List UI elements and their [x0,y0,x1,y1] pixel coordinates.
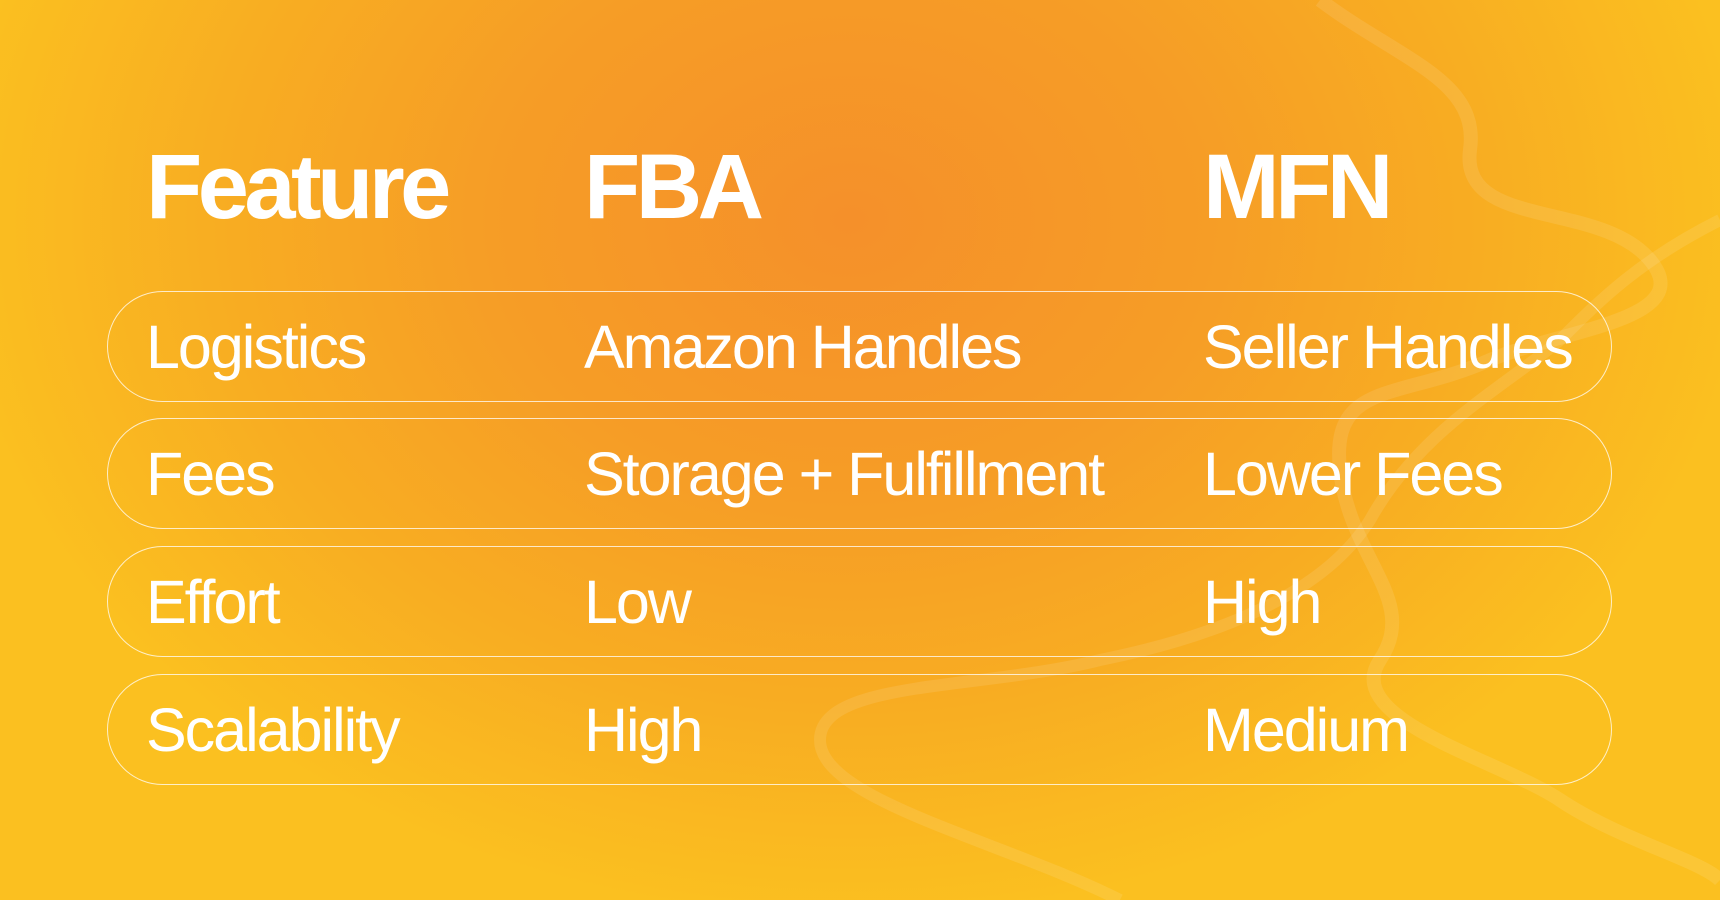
row: Logistics: Logistics [146,312,365,380]
header: Feature: Feature [146,136,447,238]
row: Fees: Storage + Fulfillment [584,440,1103,508]
row: Fees: Fees [146,440,274,508]
row: Logistics [107,291,1612,402]
row: Effort: Low [584,568,690,636]
row: Fees: Lower Fees [1203,440,1502,508]
row: Scalability: Scalability [146,696,399,764]
row: Effort: Effort [146,568,279,636]
header: MFN: MFN [1203,136,1389,238]
row: Scalability [107,674,1612,785]
row: Scalability: High [584,696,701,764]
row: Logistics: Seller Handles [1203,312,1572,380]
row: Scalability: Medium [1203,696,1408,764]
header: FBA: FBA [584,136,760,238]
row: Logistics: Amazon Handles [584,312,1021,380]
row: Effort: High [1203,568,1320,636]
row: Effort [107,546,1612,657]
row: Fees [107,418,1612,529]
